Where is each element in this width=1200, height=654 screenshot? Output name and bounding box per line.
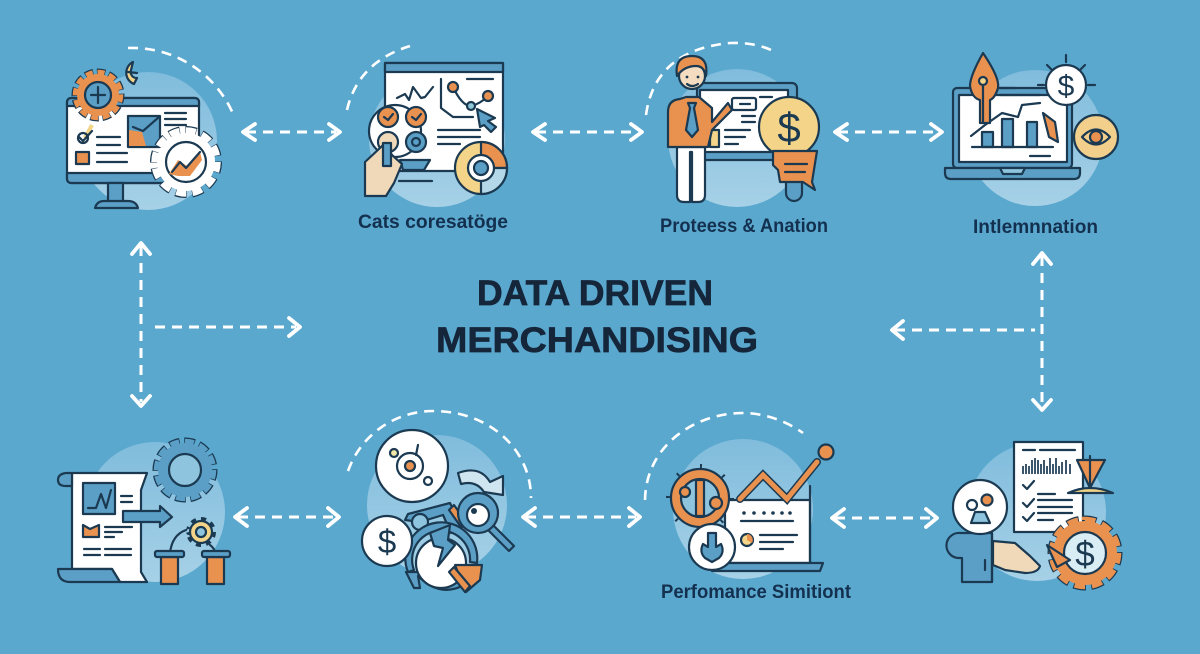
icon: document and gears [58, 442, 230, 584]
icon: presenter with coin [646, 43, 819, 207]
icon: performance laptop [645, 413, 834, 579]
icon: analysis cycle: $ [378, 523, 396, 560]
arrow: step 2 to 3 [533, 124, 642, 140]
icon: report, customer and gear: $ [1075, 535, 1095, 574]
arrow: left horizontal [155, 318, 300, 336]
label: step 4: Intlemnnation [973, 217, 1098, 238]
icon: dashboard window with hand [347, 46, 507, 207]
arrow: right vertical [1033, 253, 1051, 410]
icon: monitor with gears [67, 48, 234, 210]
icon: report, customer and gear [946, 442, 1118, 586]
icon: laptop with charts: $ [1058, 70, 1075, 103]
label: step 7: Perfomance Simitiont [661, 582, 852, 603]
arrow: left vertical [132, 243, 150, 406]
label: step 2: Cats coresatöge [358, 212, 508, 233]
arrow: step 1 to 2 [243, 124, 340, 140]
title: MERCHANDISING [436, 321, 758, 360]
arrow: step 6 to 7 [523, 508, 640, 526]
arrow: step 7 to 8 [832, 509, 937, 527]
arrow: right horizontal [892, 321, 1035, 339]
icon: presenter with coin: $ [777, 104, 801, 151]
label: step 3: Proteess & Anation [660, 216, 828, 237]
icon: laptop with charts [945, 53, 1118, 206]
title [436, 274, 758, 360]
arrow: step 5 to 6 [235, 508, 339, 526]
title: DATA DRIVEN [477, 274, 713, 313]
icon: analysis cycle [348, 411, 531, 592]
arrow: step 3 to 4 [835, 124, 942, 140]
